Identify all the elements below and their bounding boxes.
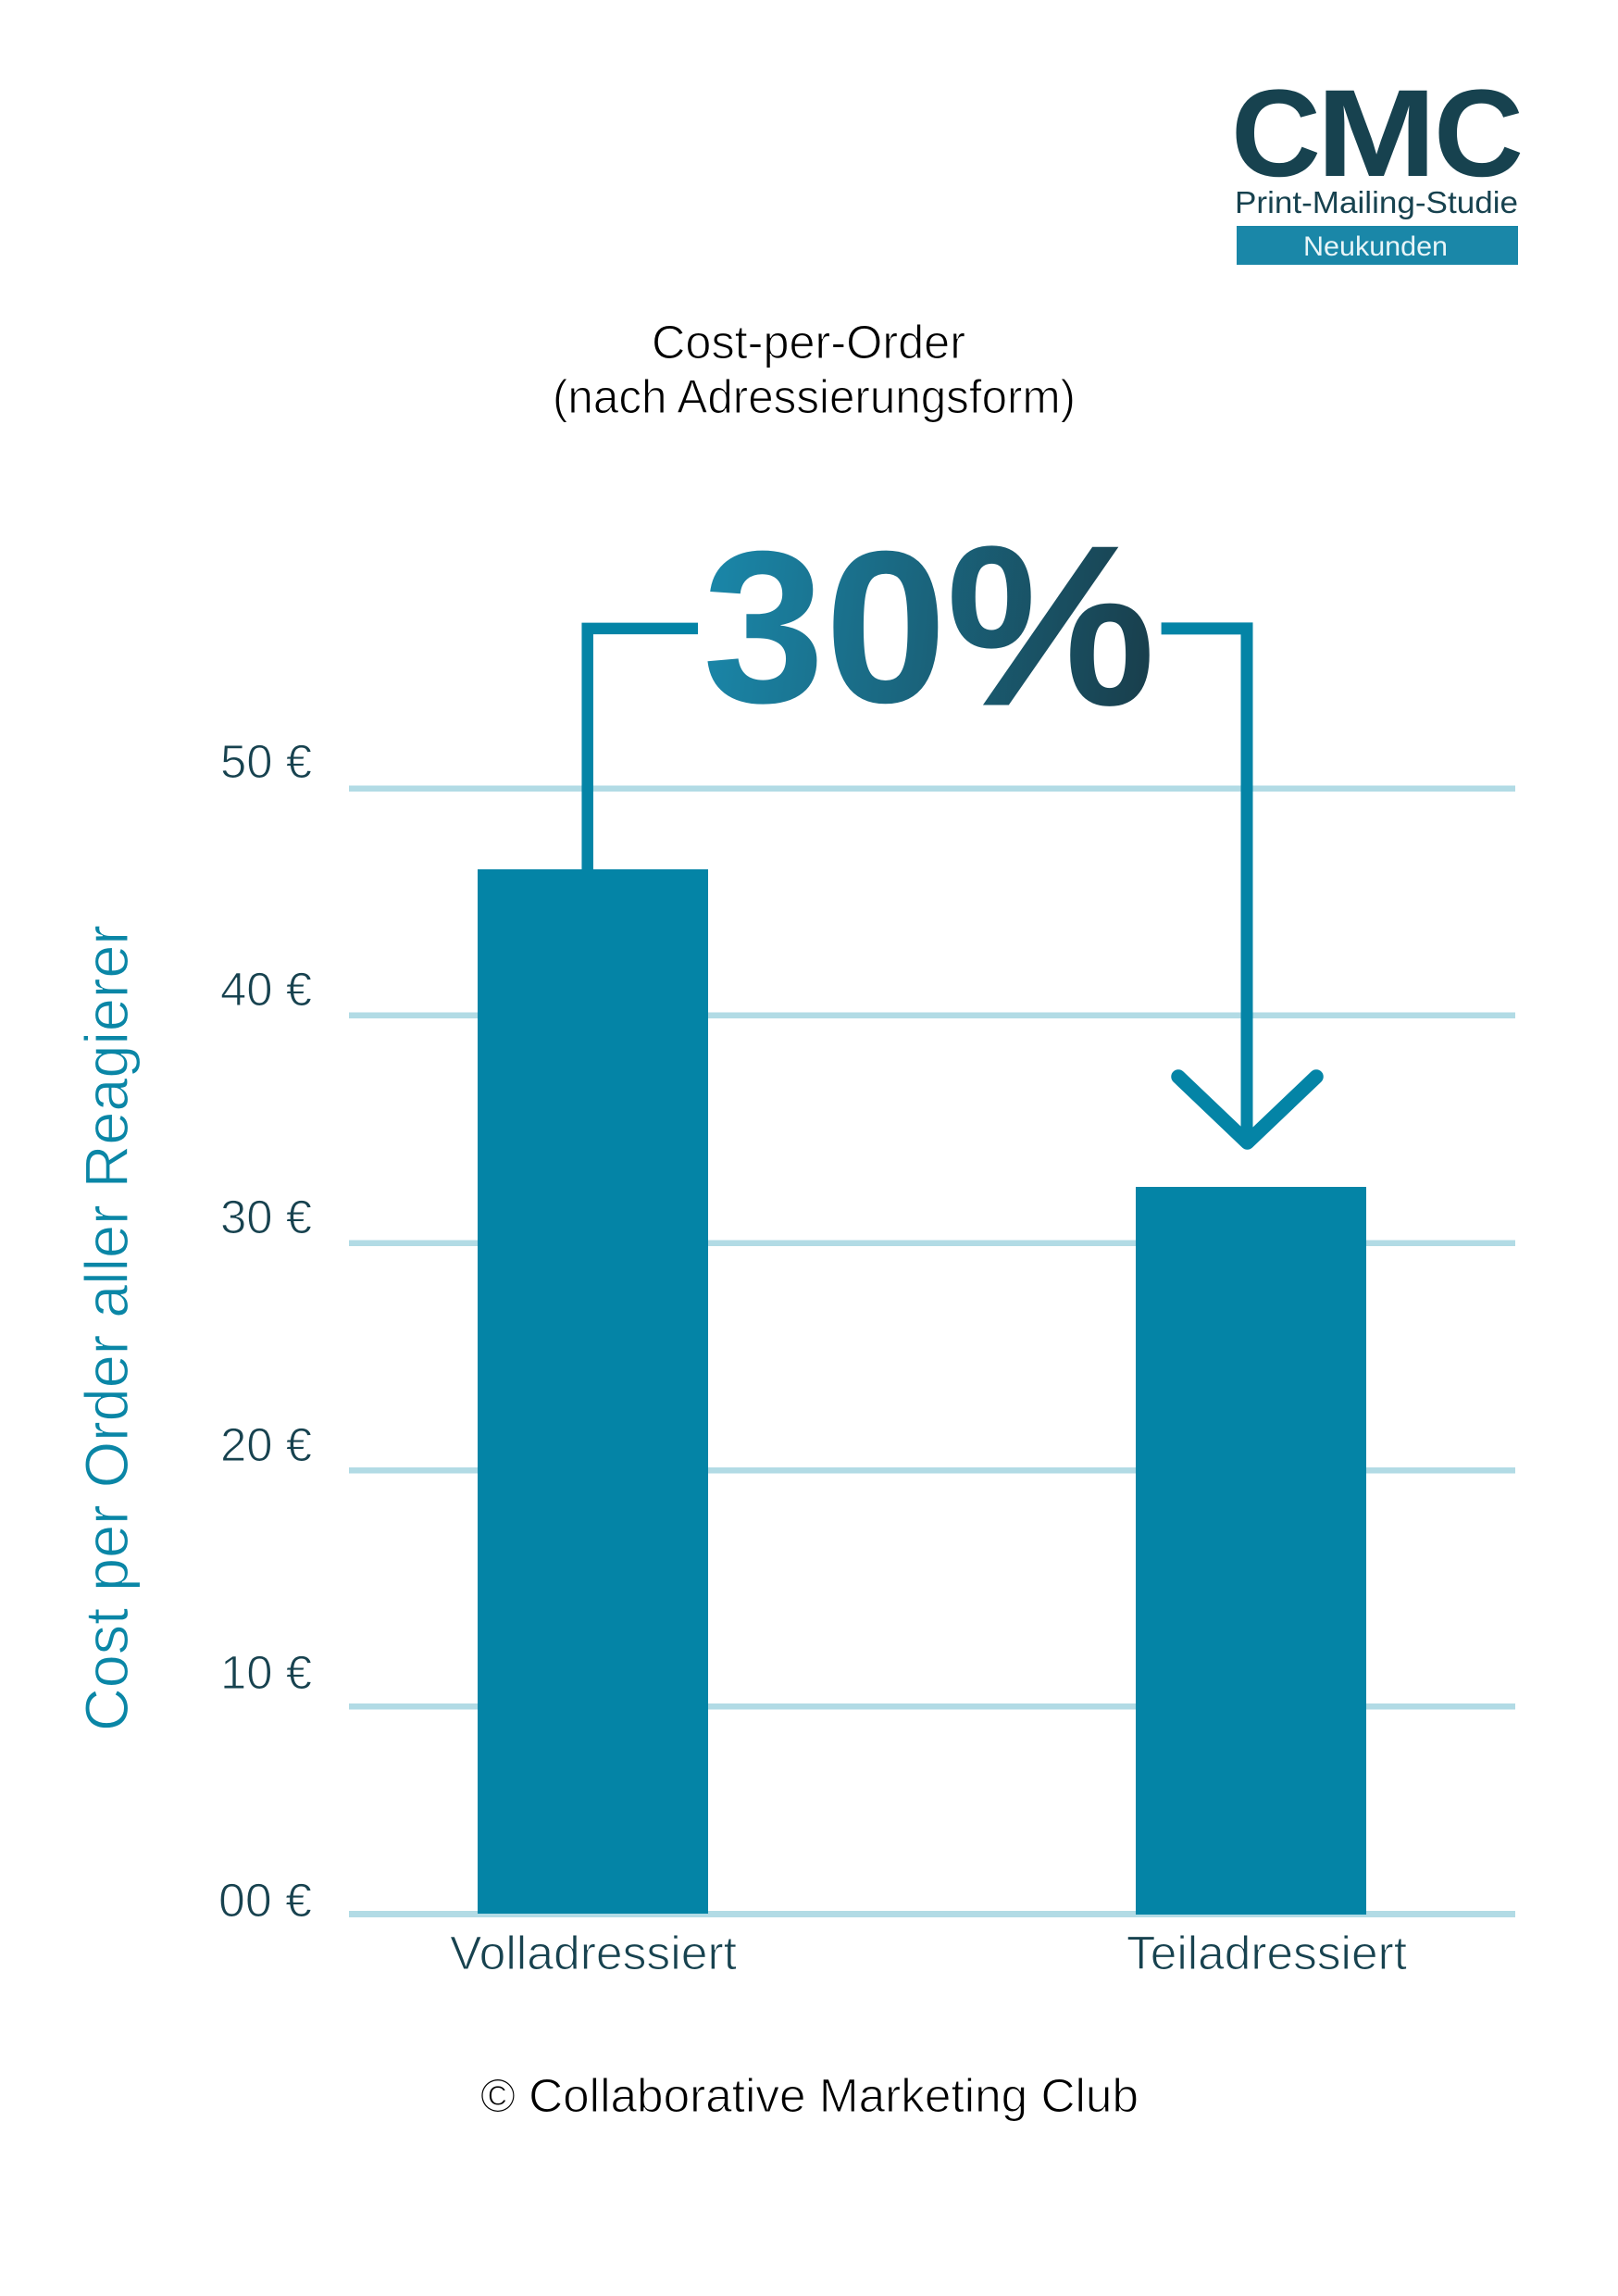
- y axis tick labels: 40 €: [220, 963, 312, 1016]
- bracket from first bar: [588, 629, 698, 869]
- bar: Volladressiert: [478, 869, 708, 1914]
- callout: 30%: 30: [703, 505, 947, 748]
- title: [553, 316, 1076, 423]
- y axis tick labels: 20 €: [220, 1418, 312, 1471]
- logo wordmark: C: [1231, 65, 1321, 203]
- y axis tick labels: 00 €: [218, 1874, 312, 1927]
- y axis tick labels: 10 €: [220, 1646, 312, 1699]
- logo band: [1237, 226, 1518, 265]
- category labels: Teiladressiert: [1126, 1927, 1407, 1979]
- category labels: Volladressiert: [450, 1927, 737, 1979]
- arrow down to second bar: [1162, 629, 1316, 1142]
- category labels: [450, 1927, 1407, 1979]
- y axis tick labels: [218, 735, 312, 1927]
- title: Cost-per-Order: [652, 316, 965, 368]
- logo wordmark: C: [1434, 65, 1524, 203]
- logo wordmark: M: [1316, 65, 1437, 203]
- logo: CMC Print-Mailing-Studie Neukunden: [1231, 65, 1524, 265]
- logo subtitle: Print-Mailing-Studie: [1235, 185, 1518, 219]
- callout: 30%: %: [947, 504, 1154, 749]
- title: (nach Adressierungsform): [553, 370, 1076, 423]
- y axis tick labels: 50 €: [220, 735, 312, 788]
- callout: 30%: [703, 504, 1154, 749]
- y axis title: Cost per Order aller Reagierer: [72, 925, 141, 1731]
- copyright: © Collaborative Marketing Club: [480, 2069, 1139, 2122]
- logo band label: Neukunden: [1303, 231, 1448, 262]
- bar: Teiladressiert: [1136, 1187, 1366, 1915]
- logo wordmark: [1231, 65, 1524, 203]
- y axis tick labels: 30 €: [220, 1191, 312, 1243]
- grid lines: [349, 785, 1515, 1917]
